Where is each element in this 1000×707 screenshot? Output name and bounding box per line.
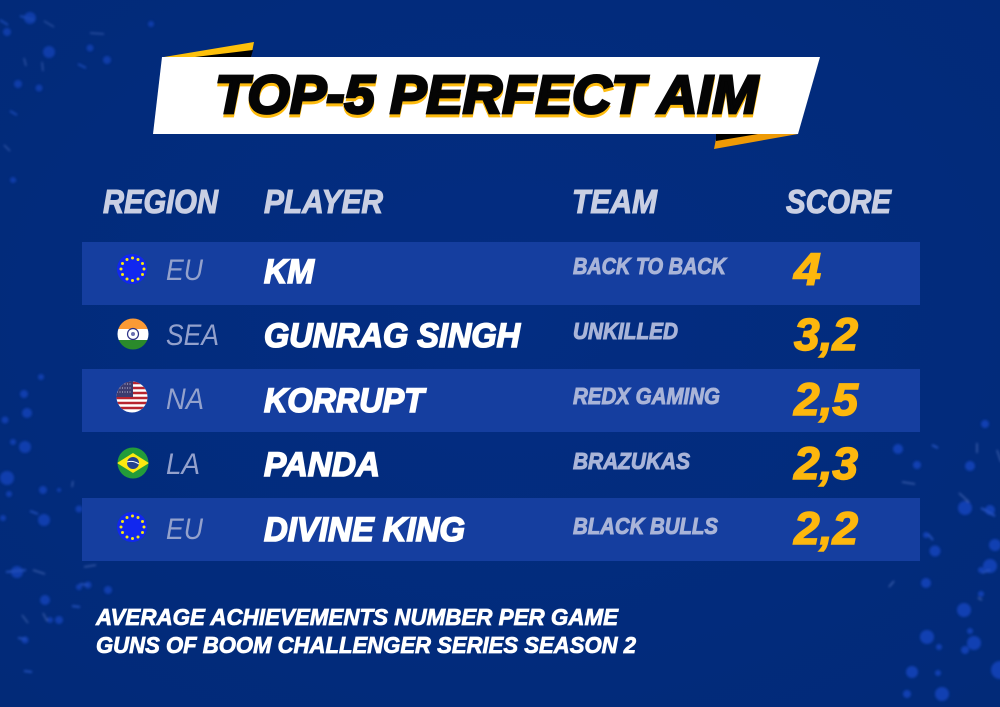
- icon: India flag: [117, 318, 149, 350]
- row 5: Divine King: BLACK BULLS: [573, 513, 719, 539]
- row 3: Korrupt: REDX GAMING: [573, 383, 720, 409]
- row 4: Panda: LA: [166, 448, 200, 481]
- row 3 band: [82, 369, 920, 432]
- row 1: KM: 4: [793, 244, 821, 295]
- particles: bottom left: [0, 374, 112, 672]
- title: TOP-5 PERFECT AIM: [215, 65, 759, 125]
- column headers: PLAYER: [264, 183, 383, 220]
- row 5: Divine King: EU: [166, 513, 203, 546]
- column headers: TEAM: [572, 183, 658, 220]
- particles: bottom right: [889, 420, 1000, 701]
- particles: top left: [0, 12, 154, 183]
- title shadow: TOP-5 PERFECT AIM: [215, 68, 759, 128]
- row 3: Korrupt: KORRUPT: [264, 382, 427, 420]
- row 1: KM: KM: [264, 253, 315, 291]
- column headers: REGION: [103, 183, 219, 220]
- row 3: Korrupt: [116, 382, 860, 423]
- row 4: Panda: 2,3: [793, 438, 858, 489]
- row 5: Divine King: DIVINE KING: [264, 511, 465, 549]
- row 3: Korrupt: NA: [166, 383, 204, 416]
- column headers: SCORE: [786, 183, 892, 220]
- footer note: [95, 604, 636, 658]
- column headers: [103, 183, 892, 220]
- row 1: KM: EU: [166, 254, 203, 287]
- icon: Brazil flag: [117, 447, 149, 479]
- row 2: Gunrag Singh: SEA: [166, 319, 219, 352]
- row 4: Panda: BRAZUKAS: [573, 448, 691, 474]
- footer note: GUNS OF BOOM CHALLENGER SERIES SEASON 2: [96, 632, 636, 658]
- footer note: AVERAGE ACHIEVEMENTS NUMBER PER GAME: [95, 604, 619, 630]
- row 2: Gunrag Singh: 3,2: [794, 309, 858, 360]
- row 4: Panda: PANDA: [264, 446, 380, 484]
- row 3: Korrupt: 2,5: [793, 374, 859, 425]
- row 2: Gunrag Singh: [118, 317, 858, 358]
- icon: EU flag: [117, 254, 147, 284]
- row 5: Divine King: 2,2: [793, 503, 858, 554]
- row 1: KM: [117, 244, 821, 295]
- row 1 band: [82, 242, 920, 305]
- row 4: Panda: [118, 446, 858, 487]
- row 2: Gunrag Singh: UNKILLED: [573, 318, 678, 344]
- row 5: Divine King: [117, 503, 858, 554]
- title banner: [153, 42, 820, 149]
- row 2: Gunrag Singh: GUNRAG SINGH: [264, 317, 521, 355]
- icon: EU flag: [117, 512, 147, 542]
- row 5 band: [82, 498, 920, 561]
- row 1: KM: BACK TO BACK: [573, 253, 727, 279]
- icon: USA flag: [116, 381, 148, 413]
